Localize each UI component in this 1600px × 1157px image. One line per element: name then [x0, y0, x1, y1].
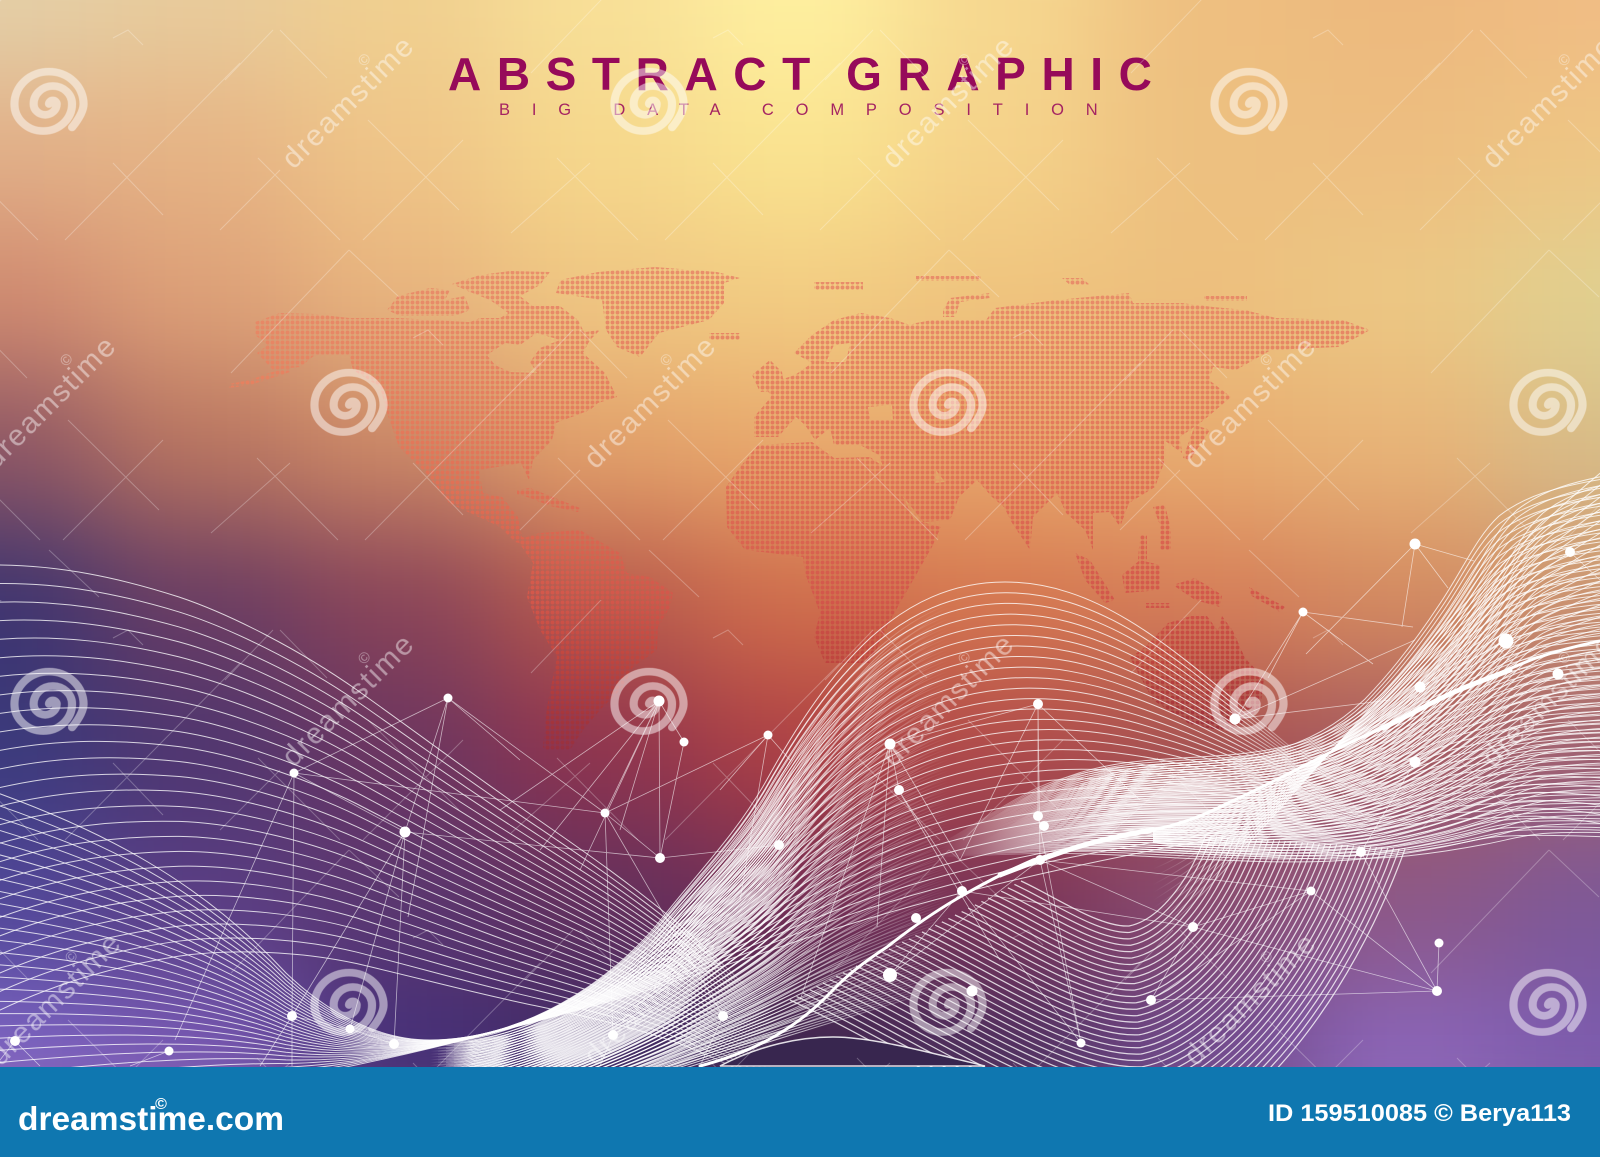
watermark wordmarks: ©	[1257, 350, 1277, 370]
wave: cross mesh above bright line	[1153, 469, 1600, 940]
watermark wordmarks: ©	[1555, 50, 1575, 70]
watermark wordmarks: ©	[1257, 947, 1277, 967]
wave: upper left line family	[0, 564, 770, 1067]
watermark wordmarks: ©	[955, 50, 975, 70]
wave: bright ribbon line	[700, 640, 1600, 1066]
watermark wordmarks: ©	[62, 947, 82, 967]
heading: ABSTRACT GRAPHIC	[448, 48, 1167, 100]
wave: dense mesh wedge on the rising slope	[432, 609, 940, 1067]
watermark wordmarks: dreamstime	[1177, 927, 1322, 1072]
footer logo: dreamstime.com	[18, 1100, 284, 1137]
watermark wordmarks: ©	[955, 648, 975, 668]
dotted world map	[200, 250, 1400, 750]
watermark wordmarks: dreamstime	[275, 30, 420, 175]
watermark wordmarks: dreamstime	[275, 628, 420, 773]
watermark wordmarks: ©	[657, 947, 677, 967]
watermark wordmarks: ©	[657, 350, 677, 370]
dark gap under the wave	[720, 1037, 985, 1066]
watermark wordmarks: ©	[355, 50, 375, 70]
network lines	[0, 544, 1600, 1066]
watermark wordmarks: dreamstime	[577, 330, 722, 475]
wave: main crest line family	[0, 582, 1328, 1067]
footer logo: ©	[155, 1096, 167, 1113]
watermark wordmarks: ©	[355, 648, 375, 668]
wave: cross mesh below bright line	[1153, 641, 1600, 1014]
watermark wordmarks: dreamstime	[875, 30, 1020, 175]
network connections and nodes	[0, 538, 1600, 1066]
subheading: BIG DATA COMPOSITION	[499, 101, 1120, 119]
footer bar	[0, 1067, 1600, 1157]
watermark wordmarks: ©	[57, 350, 77, 370]
wave: right mesh ribbon	[948, 476, 1600, 862]
footer image id: ID 159510085 © Berya113	[1268, 1100, 1571, 1127]
watermark wordmarks: dreamstime	[875, 628, 1020, 773]
watermark wordmarks: ©	[1555, 648, 1575, 668]
watermark wordmarks: dreamstime	[577, 927, 722, 1072]
wave: lower right bowl arcs	[790, 836, 1405, 1150]
title block	[448, 48, 1167, 119]
wave ribbons	[0, 472, 1600, 1067]
network nodes	[10, 538, 1575, 1056]
watermark wordmarks: dreamstime	[1177, 330, 1322, 475]
